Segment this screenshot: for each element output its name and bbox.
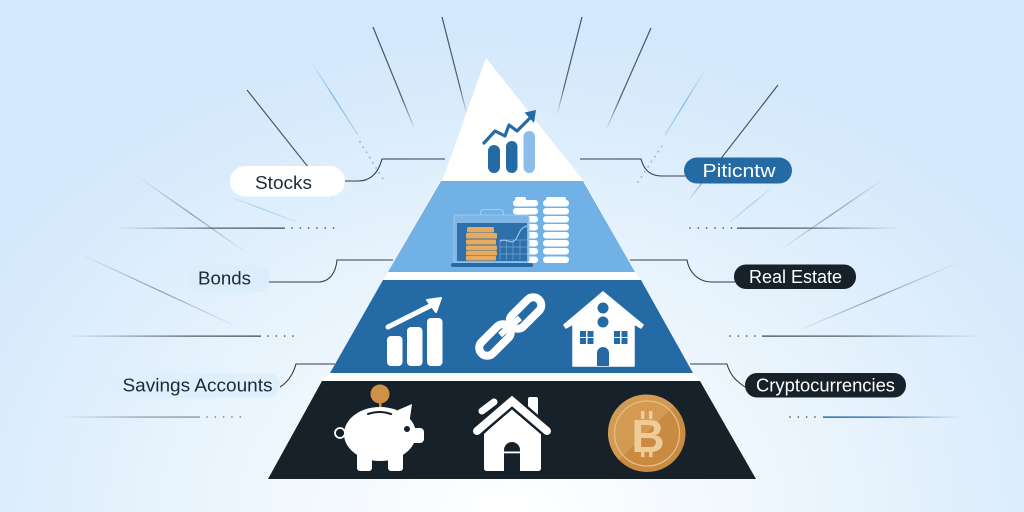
icon: growth chart <box>484 110 536 173</box>
label: Real Estate: Real Estate <box>749 266 842 287</box>
label: Savings Accounts: Savings Accounts <box>122 374 272 396</box>
icon: laptop and coin stacks <box>451 197 569 267</box>
icon: house with chimney <box>477 397 547 471</box>
tier backing <box>268 58 756 479</box>
label: Piticntw <box>684 158 792 184</box>
label: Bonds: Bonds <box>198 268 251 288</box>
label: Stocks <box>230 166 345 196</box>
icon: chain link <box>476 294 545 359</box>
connector lines <box>269 159 745 387</box>
tier 4: dark navy <box>268 381 756 479</box>
label: Bonds <box>186 265 269 292</box>
horizontal dotted lines <box>60 227 982 418</box>
label: Real Estate <box>734 264 856 289</box>
label: Piticntw: Piticntw <box>702 160 776 181</box>
tier 1: white apex <box>443 58 582 179</box>
tier 2: light blue <box>388 181 635 272</box>
icon: bars with arrow <box>387 298 442 366</box>
radiating rays <box>78 17 960 332</box>
pyramid <box>268 58 756 479</box>
label: Cryptocurrencies: Cryptocurrencies <box>756 374 895 396</box>
tier 3: mid blue <box>330 280 693 373</box>
label: Stocks: Stocks <box>255 172 312 193</box>
icon: house with windows <box>564 292 643 366</box>
icon: bitcoin coin <box>608 394 686 472</box>
icon: piggy bank <box>335 384 424 471</box>
icon: bitcoin coin: B <box>631 410 665 462</box>
